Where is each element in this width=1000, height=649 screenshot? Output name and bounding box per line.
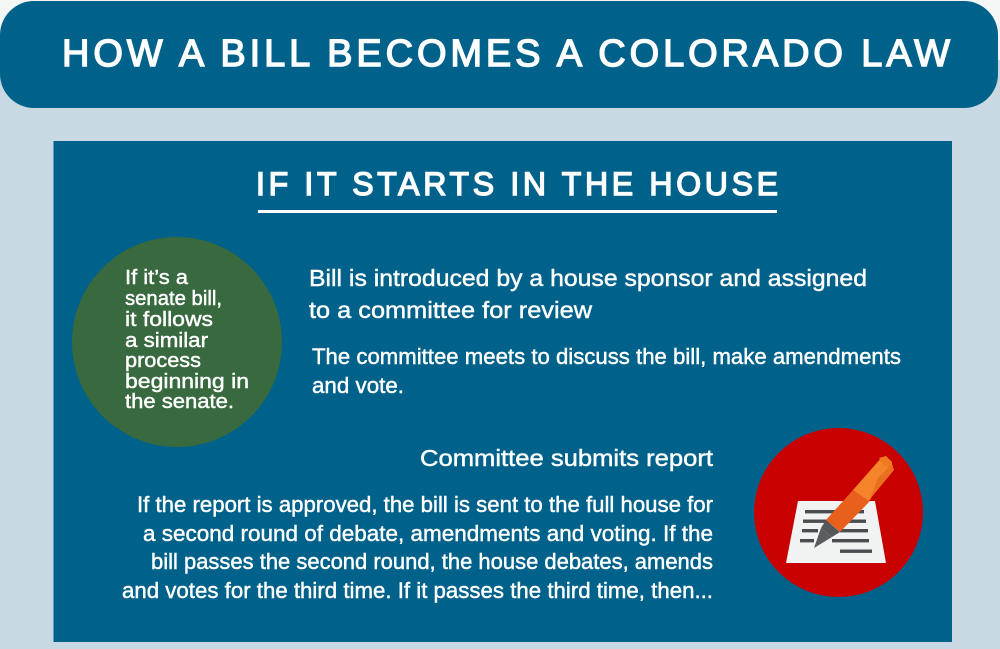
green circle note: senate bill: process [125,350,201,372]
text block: bill introduced: Bill is introduced by a house sponsor and assigned [309,265,867,291]
text block: committee submits report: Committee submits report [420,445,714,471]
panel heading: IF IT STARTS IN THE HOUSE [256,166,778,202]
text block: committee meets: The committee meets to discuss the bill, make amendments [312,344,901,369]
text block: bill introduced: to a committee for review [309,297,593,323]
title banner [0,1,998,108]
text block: bill introduced [309,265,867,323]
icon: paper and pen on red circle [754,428,923,597]
green circle note: senate bill: beginning in [125,371,249,393]
green circle note: senate bill: a similar [125,330,208,352]
title: HOW A BILL BECOMES A COLORADO LAW [62,33,950,75]
text block: committee meets [312,344,901,398]
icon: paper [786,501,886,563]
green circle note: senate bill: the senate. [125,391,234,413]
text block: report approved [122,492,713,603]
icon: text lines [800,510,872,553]
green circle note: senate bill: If it’s a [125,267,189,289]
text block: report approved: a second round of debate, amendments and voting. If the [143,521,713,546]
text block: committee meets: and vote. [312,373,404,398]
green circle note: senate bill: it follows [125,309,213,331]
text block: report approved: and votes for the third time. If it passes the third time, then... [122,578,713,603]
panel: if it starts in the house [54,141,952,642]
icon: pen [814,456,894,548]
green circle note: senate bill [72,237,282,447]
text block: report approved: If the report is approved, the bill is sent to the full house for [137,492,713,517]
text block: report approved: bill passes the second round, the house debates, amends [151,549,713,574]
green circle note: senate bill: senate bill, [125,288,222,310]
